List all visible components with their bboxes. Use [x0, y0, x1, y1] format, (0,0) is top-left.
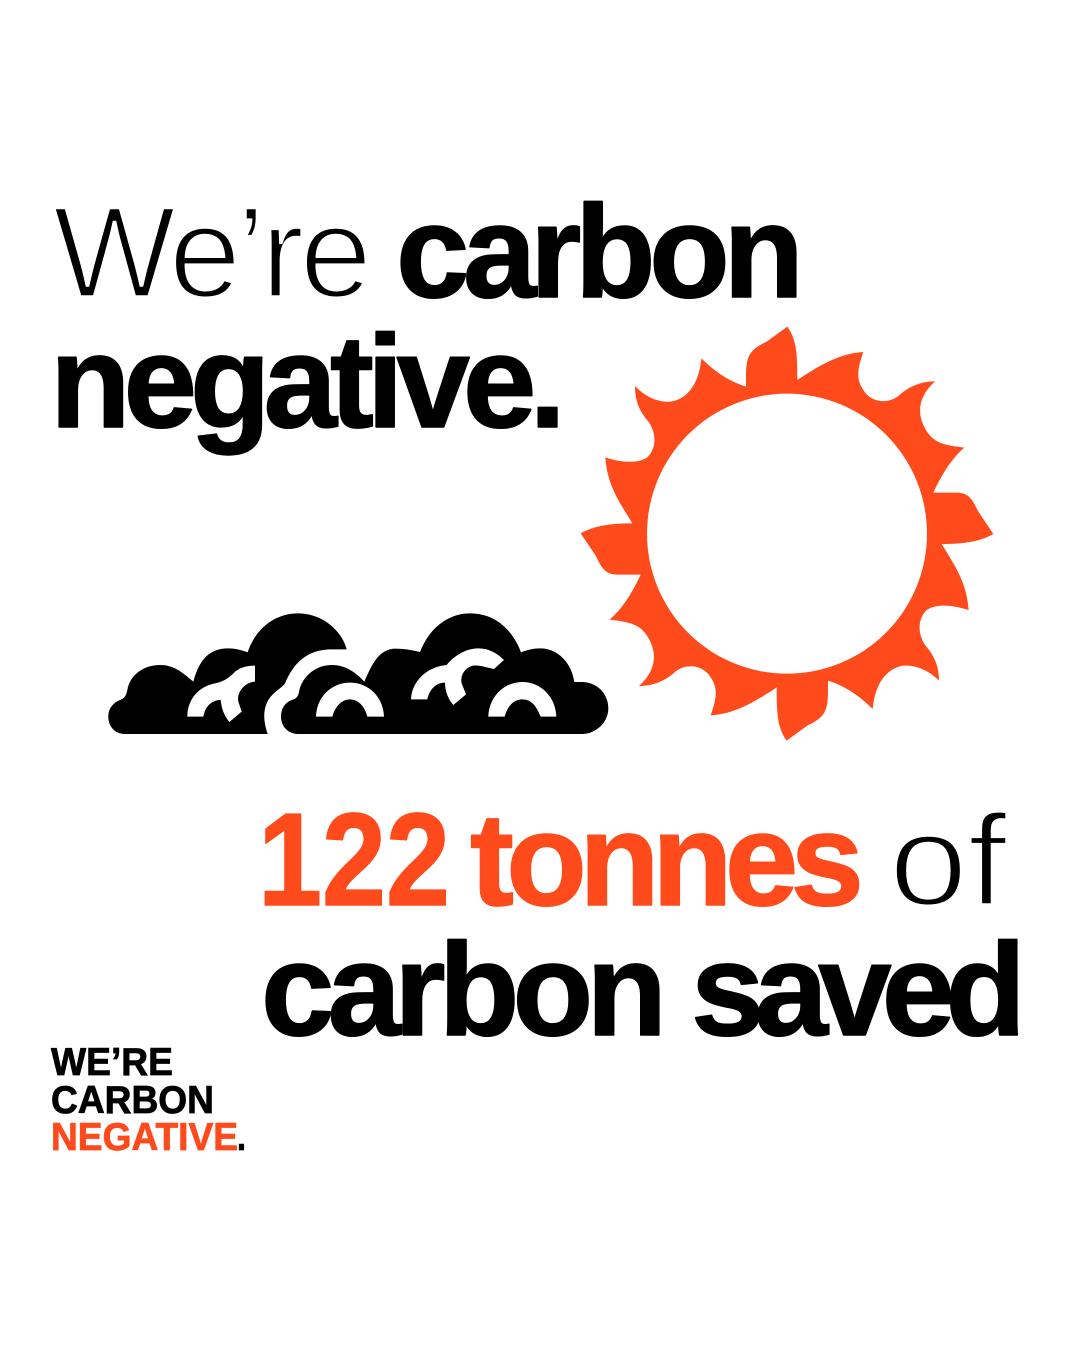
statistic: 122 tonnes of carbon saved: 122 [258, 786, 450, 933]
statistic: 122 tonnes of carbon saved: of [889, 787, 1008, 933]
heading: We're carbon negative: negative. [50, 308, 566, 455]
icon: clouds [108, 613, 608, 734]
heading: We're carbon negative: carbon [396, 178, 804, 325]
logo: We're Carbon Negative [51, 1041, 246, 1159]
icon: sun [581, 327, 993, 741]
logo: We're Carbon Negative: . [237, 1116, 246, 1159]
logo: We're Carbon Negative: CARBON [51, 1079, 214, 1122]
logo: We're Carbon Negative: WE’RE [51, 1041, 173, 1084]
statistic: 122 tonnes of carbon saved: tonnes [470, 786, 864, 933]
heading: We're carbon negative [50, 178, 804, 455]
heading: We're carbon negative: We’re [53, 179, 372, 325]
statistic: 122 tonnes of carbon saved [258, 786, 1026, 1063]
statistic: 122 tonnes of carbon saved: saved [691, 916, 1026, 1063]
logo: We're Carbon Negative: NEGATIVE [51, 1116, 238, 1159]
statistic: 122 tonnes of carbon saved: carbon [261, 916, 667, 1063]
